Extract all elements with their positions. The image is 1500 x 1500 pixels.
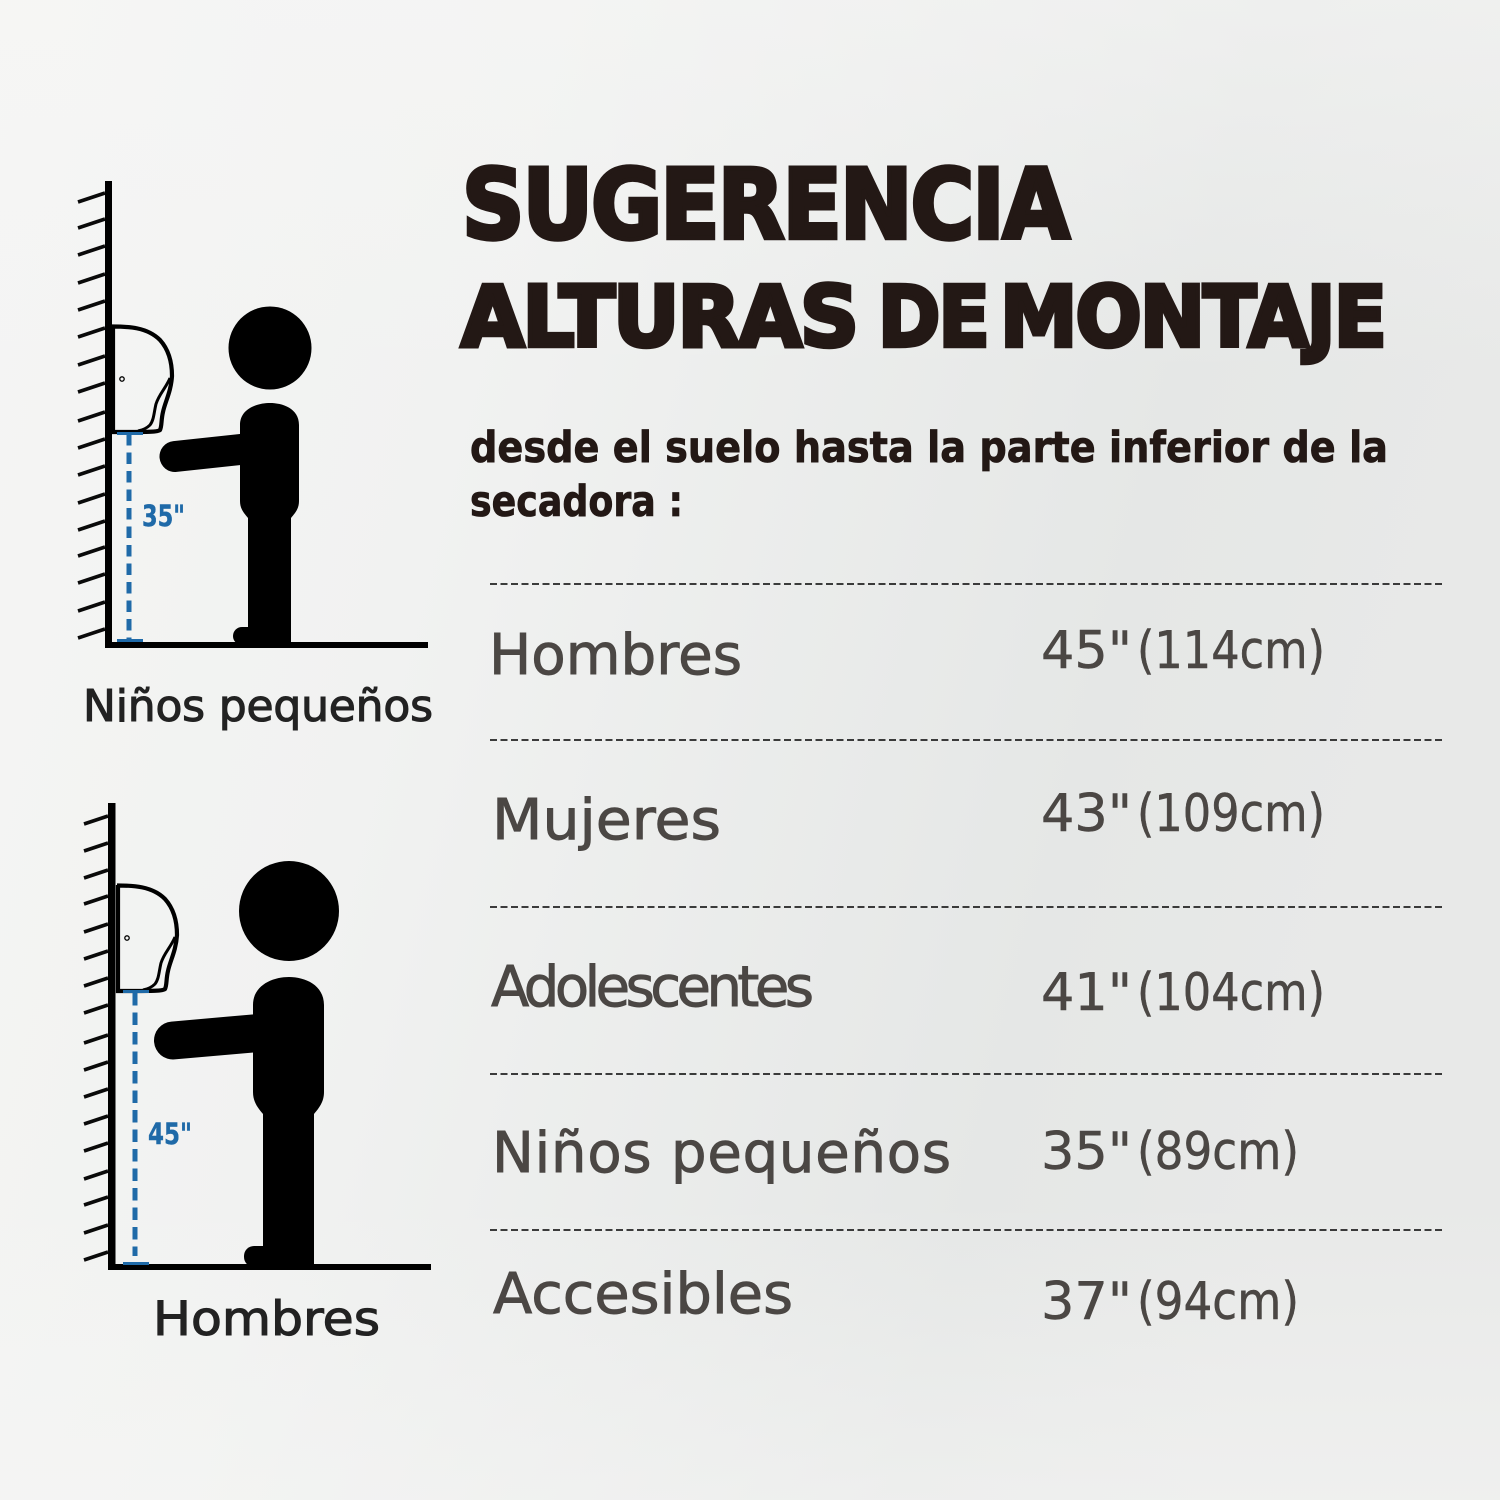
wall and floor bbox=[78, 181, 428, 648]
row: Accesibles: 37" bbox=[1041, 1272, 1132, 1332]
icon: person bbox=[175, 306, 312, 645]
label: Niños pequeños: Niños pequeños bbox=[83, 681, 433, 732]
row: Niños pequeños: (89cm) bbox=[1137, 1122, 1299, 1182]
panel: height table bbox=[489, 584, 1445, 1332]
subtitle text: desde el suelo hasta la parte inferior de la bbox=[470, 423, 1388, 473]
row: Adolescentes: 41" bbox=[1041, 963, 1132, 1023]
icon: person bbox=[173, 861, 339, 1267]
measure: 35 inch dashed line: 35" bbox=[142, 499, 185, 533]
row: Adolescentes: Adolescentes bbox=[491, 955, 814, 1020]
row: Hombres bbox=[489, 621, 1325, 688]
wall and floor bbox=[84, 803, 431, 1270]
row: Hombres: Hombres bbox=[489, 623, 742, 688]
measure: 35 inch dashed line bbox=[117, 432, 185, 642]
icon: hand dryer bbox=[112, 326, 172, 432]
panel: diagram Hombres bbox=[84, 803, 431, 1347]
row: Hombres: 45" bbox=[1041, 621, 1132, 681]
icon: hand dryer bbox=[117, 885, 177, 991]
panel: diagram Niños pequeños bbox=[78, 181, 433, 732]
row: Accesibles bbox=[493, 1262, 1299, 1332]
subtitle text: secadora : bbox=[470, 477, 683, 527]
row: Mujeres: 43" bbox=[1041, 784, 1132, 844]
title: MONTAJE bbox=[1000, 268, 1385, 366]
row: Niños pequeños: 35" bbox=[1041, 1122, 1132, 1182]
title bbox=[461, 149, 1385, 366]
row: Adolescentes bbox=[491, 955, 1325, 1023]
title: DE bbox=[878, 268, 988, 366]
row: Hombres: (114cm) bbox=[1137, 621, 1325, 681]
row: Accesibles: Accesibles bbox=[493, 1262, 793, 1327]
subtitle text bbox=[470, 423, 1388, 527]
row: Accesibles: (94cm) bbox=[1137, 1272, 1299, 1332]
row: Mujeres: Mujeres bbox=[492, 788, 721, 853]
measure: 45 inch dashed line bbox=[123, 990, 192, 1265]
row: Mujeres: (109cm) bbox=[1137, 784, 1325, 844]
measure: 45 inch dashed line: 45" bbox=[148, 1117, 192, 1151]
label: Hombres: Hombres bbox=[153, 1292, 380, 1347]
row: Niños pequeños bbox=[492, 1121, 1299, 1186]
row: Niños pequeños: Niños pequeños bbox=[492, 1121, 951, 1186]
row: Adolescentes: (104cm) bbox=[1137, 963, 1325, 1023]
title: ALTURAS bbox=[461, 268, 857, 366]
title: SUGERENCIA bbox=[462, 149, 1070, 261]
row: Mujeres bbox=[492, 784, 1325, 853]
